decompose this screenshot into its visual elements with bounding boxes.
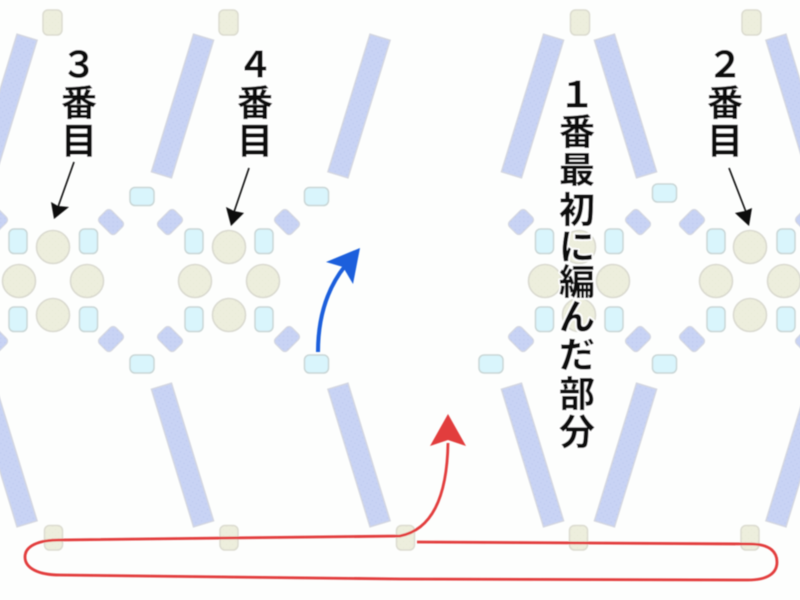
cluster 2	[700, 229, 800, 332]
label: 1番最初に編んだ部分: 最	[559, 150, 595, 190]
lower long bars	[0, 383, 800, 527]
arrow: to third stitch	[51, 162, 74, 219]
label: 1番最初に編んだ部分: に	[559, 226, 595, 268]
label: 1番最初に編んだ部分: ん	[559, 296, 595, 338]
cluster 3	[2, 229, 104, 332]
label: 1番最初に編んだ部分: １	[559, 74, 595, 116]
cluster 4	[178, 229, 280, 332]
label: 3番目: ３	[61, 44, 97, 86]
lower diamonds	[0, 325, 800, 353]
bottom row small khaki stitches	[44, 526, 759, 550]
arrow: red yarn loop	[25, 414, 777, 580]
label: 4番目: ４	[237, 44, 273, 86]
label: 3番目	[61, 44, 97, 162]
cluster 1	[528, 229, 630, 332]
arrow: to second stitch	[729, 168, 752, 226]
label: 2番目: 目	[707, 120, 743, 162]
label: 2番目: ２	[707, 44, 743, 86]
label: 1番最初に編んだ部分: 分	[559, 412, 595, 452]
top row small khaki stitches	[43, 10, 761, 35]
label: 4番目: 目	[237, 120, 273, 162]
arrow: to fourth stitch	[226, 168, 249, 226]
label: 3番目: 番	[61, 82, 97, 124]
label: 4番目: 番	[237, 82, 273, 124]
upper light blue stitches	[130, 184, 676, 206]
label: 4番目	[237, 44, 273, 162]
lower light blue stitches	[130, 355, 676, 373]
label: 2番目: 番	[707, 82, 743, 124]
label: 1番最初に編んだ部分: 番	[559, 112, 595, 152]
label: 1番最初に編んだ部分: だ	[559, 334, 595, 376]
label: 1番最初に編んだ部分	[559, 74, 595, 452]
label: 1番最初に編んだ部分: 編	[559, 262, 595, 302]
label: 1番最初に編んだ部分: 部	[559, 374, 595, 414]
arrow: blue curved turn	[318, 248, 360, 352]
label: 1番最初に編んだ部分: 初	[559, 190, 595, 230]
label: 2番目	[707, 44, 743, 162]
upper diamonds	[0, 208, 800, 236]
upper long bars	[0, 34, 800, 178]
label: 3番目: 目	[61, 120, 97, 162]
